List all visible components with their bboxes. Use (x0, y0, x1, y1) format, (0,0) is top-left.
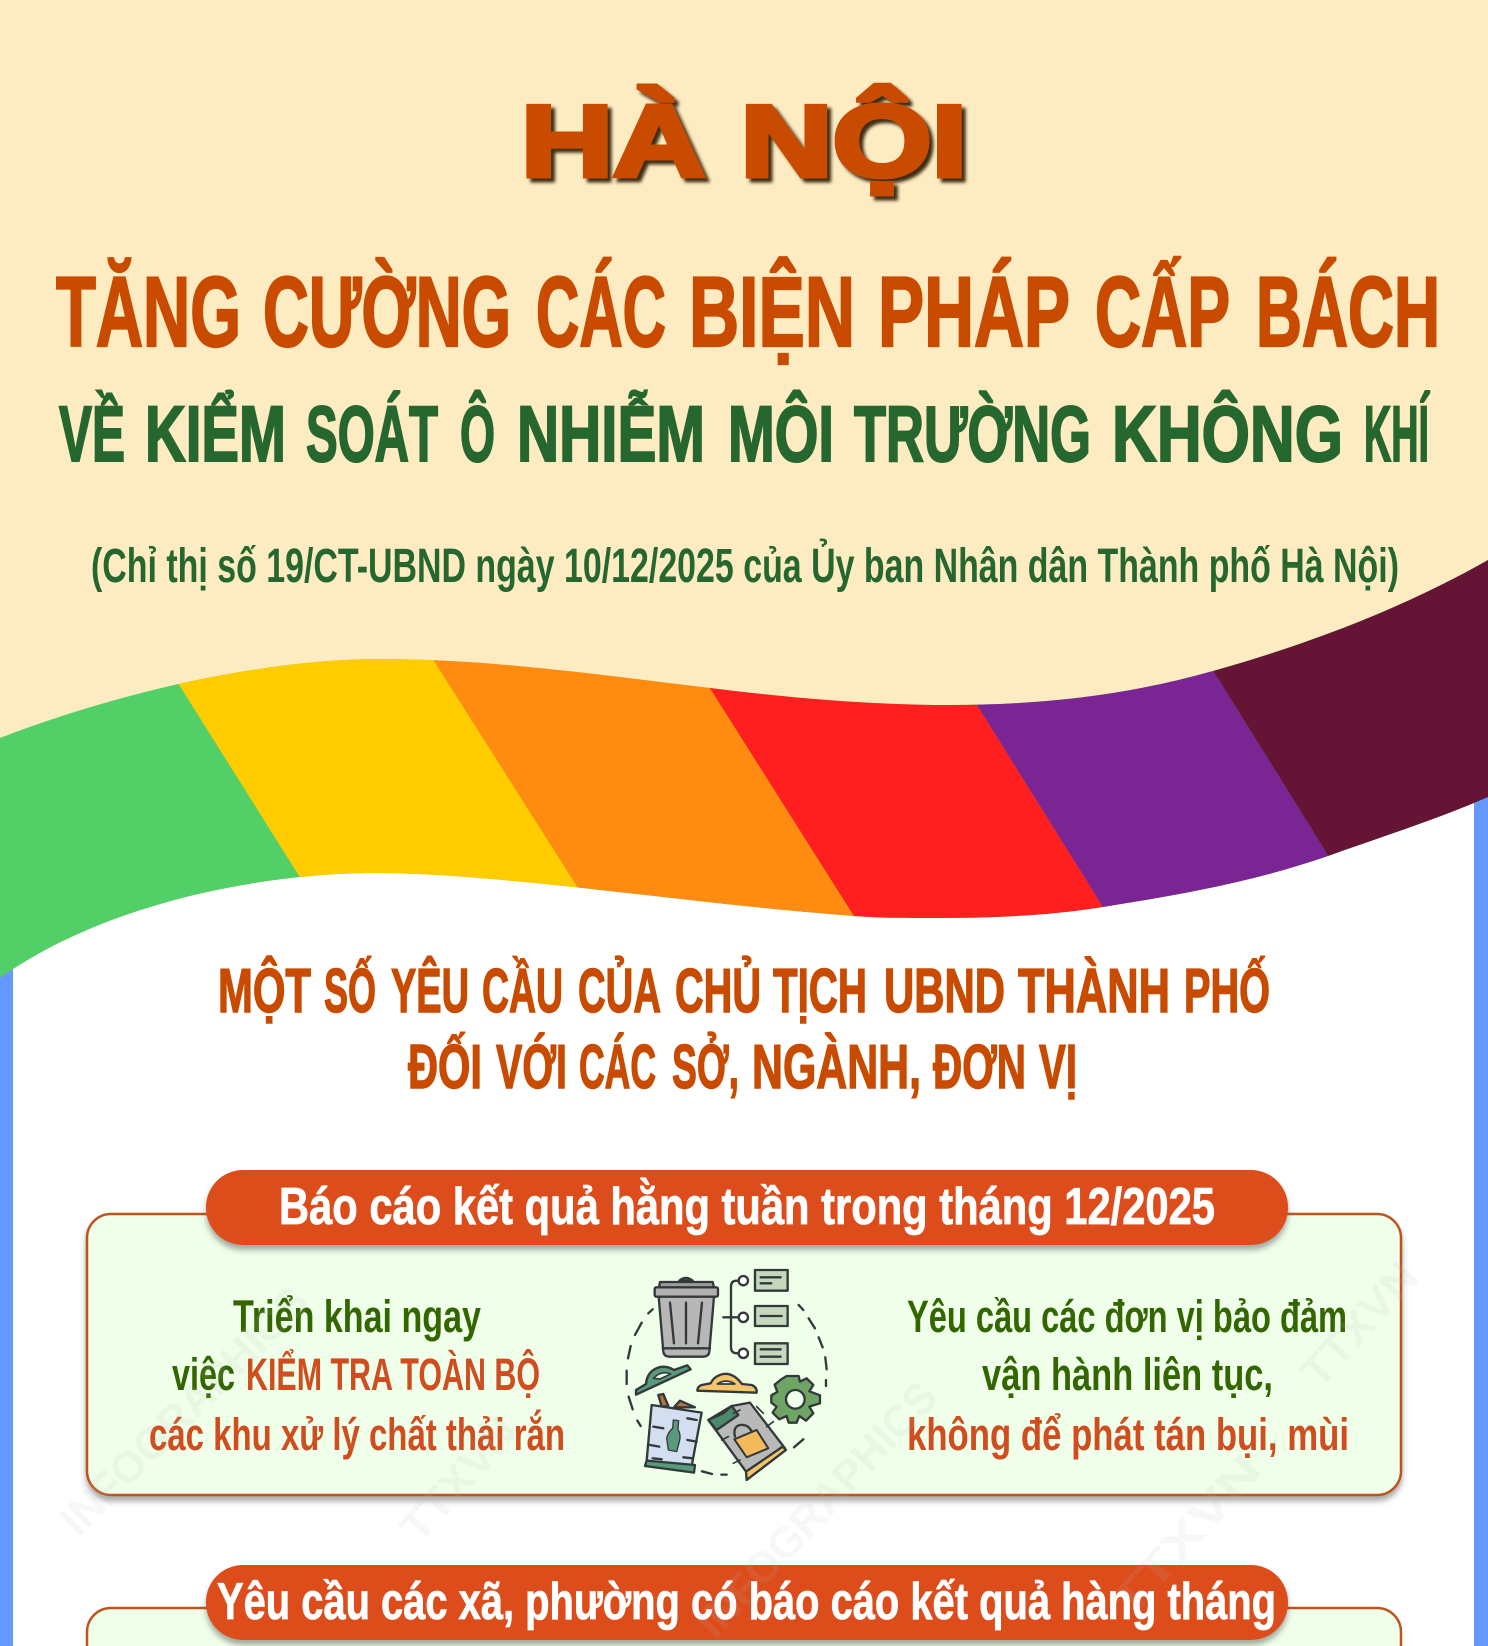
watermark: TTXVN (1101, 1445, 1271, 1627)
panel box (87, 1214, 1401, 1495)
panel: monthly report (87, 1565, 1401, 1646)
section heading (218, 957, 1270, 1102)
headline line 2: TRƯỜNG (854, 389, 1091, 478)
section heading: PHỐ (1184, 957, 1270, 1026)
section heading: VỊ (1039, 1033, 1077, 1102)
watermark (50, 1252, 1428, 1646)
headline line 1: CẤP (1095, 256, 1230, 367)
headline line 1: CƯỜNG (263, 256, 511, 367)
icon: waste bin, recycling bags and gear (627, 1270, 827, 1480)
headline line 1: BIỆN (689, 256, 855, 367)
section heading: ĐỐI (408, 1033, 482, 1102)
section heading: CẦU (482, 957, 563, 1026)
section heading: ĐƠN (933, 1033, 1026, 1102)
headline line 1: CÁC (536, 256, 666, 367)
section heading: TỊCH (773, 957, 867, 1026)
section heading: SỞ, (672, 1033, 739, 1102)
watermark: INFOGRAPHICS (50, 1277, 318, 1545)
watermark: TTXVN (1291, 1252, 1428, 1397)
section heading: CHỦ (675, 957, 761, 1026)
left text block: KIỂM TRA TOÀN BỘ (246, 1349, 540, 1400)
section heading: UBND (884, 957, 1005, 1026)
panel: weekly report (87, 1170, 1401, 1495)
headline line 2: KIỂM (145, 389, 286, 478)
title: Hà Nội: HÀ NỘI (521, 86, 967, 198)
left text block: Triển khai ngay (233, 1291, 481, 1342)
panel pill heading (206, 1565, 1288, 1640)
section heading: THÀNH (1018, 957, 1170, 1026)
headline line 2 (59, 389, 1430, 478)
headline line 2: Ô (460, 389, 495, 478)
panel pill heading (206, 1170, 1288, 1245)
headline line 2: MÔI (728, 389, 834, 478)
section heading: CỦA (578, 957, 661, 1026)
headline line 2: VỀ (59, 389, 125, 478)
right text block (907, 1291, 1349, 1460)
headline line 2: NHIỄM (517, 389, 705, 478)
section heading: VỚI (496, 1033, 567, 1102)
section heading: CÁC (579, 1033, 656, 1102)
section heading: MỘT (218, 957, 311, 1026)
watermark: INFOGRAPHICS (686, 1372, 947, 1646)
section heading: SỐ (324, 957, 376, 1026)
section heading: NGÀNH, (752, 1033, 921, 1102)
right text block: vận hành liên tục, (982, 1349, 1273, 1400)
watermark: TTXVN (391, 1407, 528, 1552)
rainbow air quality band (0, 560, 1488, 978)
headline line 1 (56, 256, 1440, 367)
headline line 2: KHÔNG (1112, 389, 1343, 478)
left text block (149, 1291, 565, 1460)
panel box (87, 1608, 1401, 1646)
headline line 1: PHÁP (878, 256, 1070, 367)
section heading: YÊU (391, 957, 469, 1026)
panel pill heading: Báo cáo kết quả hằng tuần trong tháng 12/2025 (279, 1177, 1215, 1236)
headline line 2: SOÁT (306, 389, 438, 478)
headline line 1: TĂNG (56, 256, 241, 367)
left text block: các khu xử lý chất thải rắn (149, 1409, 565, 1460)
right text block: không để phát tán bụi, mùi (907, 1409, 1349, 1460)
left text block: việc (172, 1349, 235, 1400)
